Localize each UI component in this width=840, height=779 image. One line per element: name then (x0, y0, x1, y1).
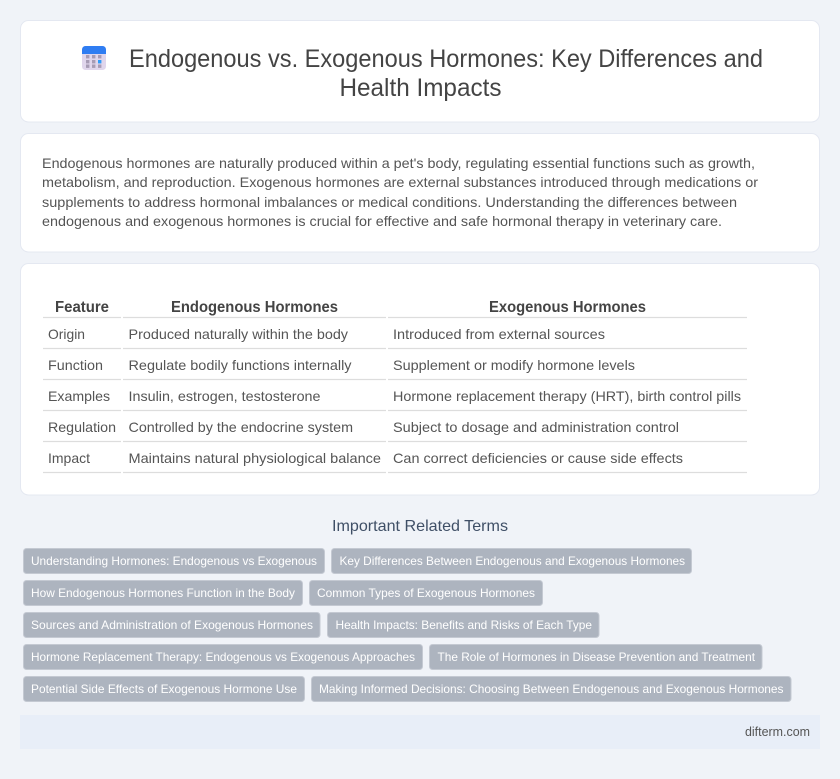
row: regulation: Regulation (48, 419, 116, 435)
row: impact: Impact (48, 450, 90, 466)
panel: comparison table (20, 264, 820, 495)
row: function: Function (48, 357, 103, 373)
tag: Potential Side Effects of Exogenous Hormone Use (31, 682, 297, 696)
heading: related terms: Important Related Terms (332, 518, 508, 535)
tag: How Endogenous Hormones Function in the Body (31, 586, 295, 600)
tag: Making Informed Decisions: Choosing Between Endogenous and Exogenous Hormones (319, 682, 784, 696)
row: impact: Can correct deficiencies or cause side effects (393, 450, 683, 466)
row: examples (43, 388, 747, 410)
tag (24, 548, 324, 574)
tag: Hormone Replacement Therapy: Endogenous vs Exogenous Approaches (31, 650, 415, 664)
panel: header (20, 20, 820, 122)
row: function: Regulate bodily functions internally (128, 357, 352, 373)
tag (24, 580, 302, 606)
title: Endogenous vs. Exogenous Hormones: Key Differences and (129, 45, 763, 73)
row: regulation: Subject to dosage and administration control (393, 419, 679, 435)
tag (24, 676, 304, 702)
table header (43, 299, 747, 318)
row: function: Supplement or modify hormone levels (393, 357, 635, 373)
row: origin: Produced naturally within the body (128, 326, 348, 342)
footer (20, 715, 820, 749)
text block: description: endogenous and exogenous hormones is crucial for effective and safe hormonal therapy in veterinary care. (42, 213, 722, 229)
row: origin: Introduced from external sources (393, 326, 605, 342)
tag: The Role of Hormones in Disease Prevention and Treatment (438, 650, 756, 664)
tag: Sources and Administration of Exogenous Hormones (31, 618, 313, 632)
tag (24, 612, 320, 638)
tag (328, 612, 599, 638)
panel: description (20, 134, 820, 252)
table header: Feature (55, 299, 109, 316)
row: examples: Examples (48, 388, 110, 404)
text block: description: supplements to address hormonal imbalances or medical conditions. Understanding the differences between (42, 194, 737, 210)
tag: Key Differences Between Endogenous and Exogenous Hormones (340, 554, 685, 568)
tag (312, 676, 791, 702)
row: function (43, 357, 747, 380)
related term tags (24, 548, 791, 702)
footer: difterm.com (745, 724, 810, 739)
tag: Health Impacts: Benefits and Risks of Each Type (336, 618, 592, 632)
row: impact: Maintains natural physiological balance (128, 450, 381, 466)
tag (310, 580, 542, 606)
row: regulation (43, 419, 747, 442)
title (129, 45, 763, 102)
table header: Exogenous Hormones (489, 299, 646, 316)
tag: Understanding Hormones: Endogenous vs Exogenous (31, 554, 317, 568)
tag (332, 548, 692, 574)
tag (430, 644, 762, 670)
title: Health Impacts (340, 74, 502, 102)
text block: description: metabolism, and reproduction. Exogenous hormones are external substances introduced through medications or (42, 174, 758, 190)
icon: calendar (82, 46, 106, 70)
tag: Common Types of Exogenous Hormones (317, 586, 535, 600)
row: origin: Origin (48, 326, 85, 342)
row: examples: Insulin, estrogen, testosterone (128, 388, 321, 404)
table header: Endogenous Hormones (171, 299, 338, 316)
tag (24, 644, 422, 670)
row: origin (43, 326, 747, 348)
row: examples: Hormone replacement therapy (HRT), birth control pills (393, 388, 741, 404)
text block: description: Endogenous hormones are naturally produced within a pet's body, regulating essential functions such as growth, (42, 155, 755, 171)
row: regulation: Controlled by the endocrine system (128, 419, 353, 435)
text block: description (42, 155, 758, 229)
row: impact (43, 450, 747, 472)
